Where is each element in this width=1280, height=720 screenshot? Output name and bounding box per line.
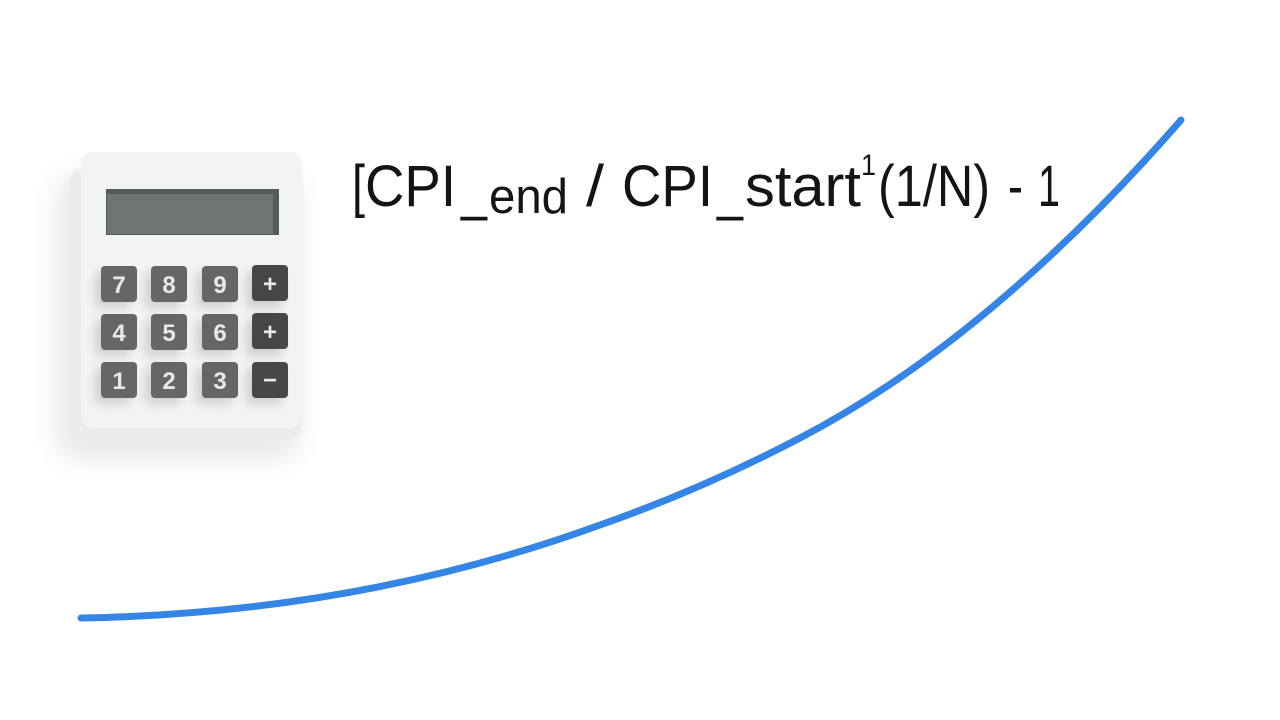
calculator keys: + — [263, 319, 277, 346]
calculator shadow — [58, 176, 298, 458]
formula — [352, 149, 1060, 224]
formula: end — [489, 170, 568, 224]
formula: _ — [716, 157, 744, 222]
calculator keys: 6 — [213, 320, 227, 347]
calculator keys: 2 — [162, 368, 176, 395]
calculator key shadows — [95, 272, 282, 404]
formula: (1/N) — [878, 154, 990, 219]
calculator keys: 1 — [112, 368, 126, 395]
calculator keys: 3 — [213, 368, 227, 395]
calculator keys: 7 — [112, 272, 126, 299]
formula: start — [745, 154, 861, 219]
formula: _ — [460, 157, 488, 222]
calculator keys: 4 — [112, 320, 126, 347]
formula: CPI — [622, 154, 713, 219]
formula: / — [586, 154, 605, 219]
calculator keys: 8 — [162, 272, 176, 299]
calculator keys: − — [263, 367, 277, 394]
calculator display — [106, 189, 279, 235]
calculator keys: 9 — [213, 272, 227, 299]
formula: 1 — [861, 149, 876, 182]
icon: calculator — [58, 152, 302, 458]
formula: CPI — [365, 154, 456, 219]
formula: [ — [352, 154, 365, 219]
formula: - — [1008, 154, 1023, 219]
formula: 1 — [1038, 154, 1060, 219]
calculator side edge — [70, 168, 302, 439]
calculator body — [81, 152, 302, 428]
calculator keys: + — [263, 271, 277, 298]
growth curve — [81, 120, 1181, 618]
calculator keys — [101, 265, 288, 398]
calculator keys: 5 — [162, 320, 176, 347]
